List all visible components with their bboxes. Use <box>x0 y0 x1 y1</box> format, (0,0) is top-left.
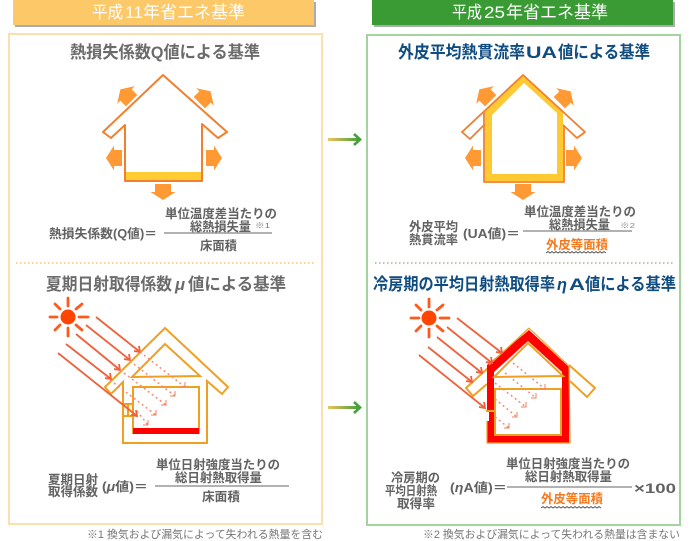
formula: mu value: 取得係数 <box>48 484 98 499</box>
heading: mu value <box>46 274 286 294</box>
formula: mu value: 夏期日射 <box>48 472 98 487</box>
heading: UA value: UA <box>526 43 557 62</box>
formula: UA value: 外皮等面積 <box>546 237 608 252</box>
formula: Q value: ※1 <box>255 221 270 230</box>
heading: eta A value: 値による基準 <box>585 274 676 294</box>
formula: UA value <box>409 204 636 253</box>
header: Heisei 11 standard: 11 <box>125 3 143 22</box>
formula: Q value: 床面積 <box>200 238 237 253</box>
arrow: lower comparison <box>328 402 360 413</box>
heading: Q value: 熱損失係数Q値による基準 <box>70 42 260 62</box>
icon: sun <box>50 298 88 336</box>
heading: eta A value: 冷房期の平均日射熱取得率 <box>373 275 555 294</box>
formula: eta A value: 冷房期の <box>391 470 440 485</box>
heading: UA value: 外皮平均熱貫流率 <box>398 42 525 62</box>
header: Heisei 25 standard: 年省エネ基準 <box>506 3 608 22</box>
formula: Q value <box>49 206 277 253</box>
arrow: upper comparison <box>328 134 360 145</box>
header: Heisei 25 standard <box>372 0 675 27</box>
heading: eta A value <box>373 274 676 294</box>
heading: mu value: μ <box>174 275 186 294</box>
header: Heisei 25 standard: 平成 <box>452 3 482 22</box>
heading: UA value <box>398 42 650 62</box>
formula: UA value: 熱貫流率 <box>409 232 458 247</box>
formula: eta A value: 総日射熱取得量 <box>525 469 612 484</box>
formula: mu value: (μ値)＝ <box>102 479 148 494</box>
heading: mu value: 夏期日射取得係数 <box>46 275 172 294</box>
formula: eta A value <box>385 456 676 511</box>
header: Heisei 11 standard: 年省エネ基準 <box>143 3 245 22</box>
heading: UA value: 値による基準 <box>558 42 650 62</box>
panel: Heisei 11 criteria <box>9 34 322 524</box>
header: Heisei 11 standard: 平成 <box>92 3 123 22</box>
footnote 2: ※2 換気および漏気によって失われる熱量は含まない <box>423 527 680 541</box>
formula: eta A value: 平均日射熱 <box>385 483 437 498</box>
formula: Q value: 単位温度差当たりの <box>165 206 277 221</box>
formula: mu value <box>48 457 289 504</box>
formula: UA value: (UA値)＝ <box>463 226 520 241</box>
heading: eta A value: A <box>569 275 585 294</box>
formula: UA value: 外皮平均 <box>409 219 458 234</box>
icon: house with solar gain <box>58 317 228 443</box>
formula: eta A value: 外皮等面積 <box>541 491 603 506</box>
heading: mu value: 値による基準 <box>188 274 286 294</box>
formula: UA value: 総熱損失量 <box>549 217 610 232</box>
icon: sun <box>411 299 449 337</box>
footnote 1: ※1 換気および漏気によって失われる熱量を含む <box>87 527 323 541</box>
formula: eta A value: 取得率 <box>397 496 435 511</box>
panel: Heisei 25 criteria <box>367 35 680 525</box>
formula: mu value: 床面積 <box>202 489 240 504</box>
heading: eta A value: η <box>557 275 567 294</box>
header: Heisei 25 standard: 25 <box>484 3 505 22</box>
formula: eta A value: 単位日射強度当たりの <box>506 456 630 471</box>
icon: house with envelope solar gain <box>419 318 595 443</box>
formula: eta A value: ×100 <box>634 480 676 496</box>
formula: mu value: 単位日射強度当たりの <box>156 457 280 472</box>
formula: Q value: 総熱損失量 <box>190 219 251 234</box>
formula: eta A value: (ηA値)＝ <box>450 480 507 495</box>
formula: UA value: 単位温度差当たりの <box>524 204 636 219</box>
icon: house with heat loss arrows <box>103 75 227 200</box>
icon: house with envelope heat loss <box>462 75 585 200</box>
formula: UA value: ※2 <box>620 221 635 230</box>
formula: mu value: 総日射熱取得量 <box>175 470 262 485</box>
formula: Q value: 熱損失係数(Q値)＝ <box>49 226 157 241</box>
header: Heisei 11 standard <box>13 0 316 27</box>
